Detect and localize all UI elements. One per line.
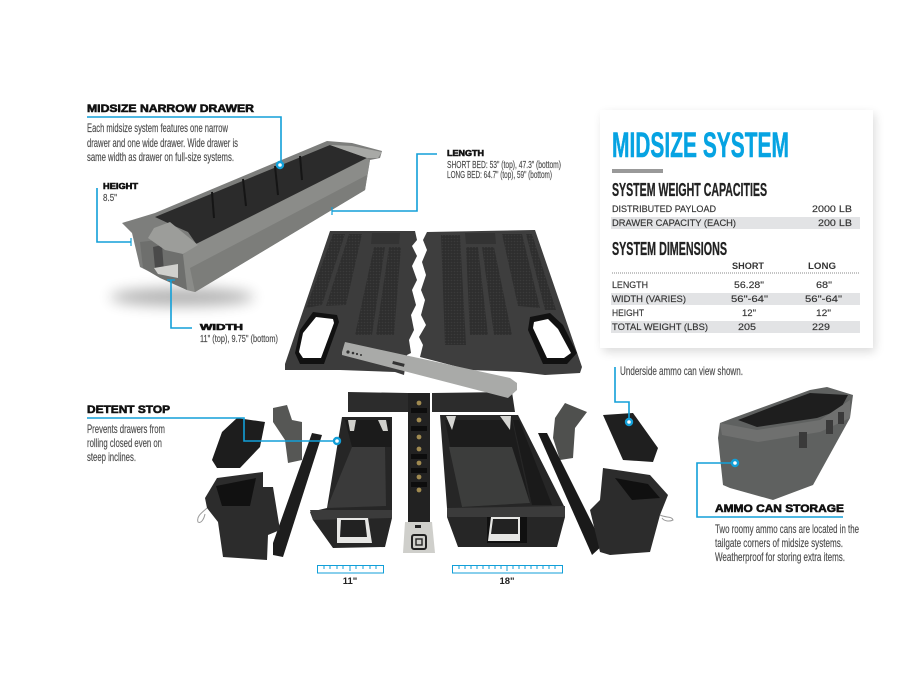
callout: length	[332, 148, 561, 215]
table: weight capacities: 200 LB	[818, 218, 852, 228]
table: system dimensions: 12"	[816, 308, 831, 318]
callout: length: LONG BED: 64.7" (top), 59" (bottom)	[447, 170, 552, 181]
callout: length: SHORT BED: 53" (top), 47.3" (bottom)	[447, 160, 561, 171]
callout: ammo can storage	[697, 460, 859, 564]
table: system dimensions: 12"	[742, 308, 756, 318]
photo: right bracket	[553, 403, 587, 460]
callout: height: 8.5"	[103, 193, 117, 204]
callout: ammo can storage: AMMO CAN STORAGE	[715, 503, 844, 515]
title: midsize system: MIDSIZE SYSTEM	[612, 126, 789, 165]
callout: underside ammo can view	[615, 364, 743, 425]
table: weight capacities	[611, 204, 860, 229]
table: system dimensions: SHORT	[732, 261, 765, 271]
callout: height	[97, 181, 139, 246]
photo: large ammo can	[718, 387, 853, 500]
callout: detent stop: DETENT STOP	[87, 404, 170, 416]
photo: narrow drawer bottom	[310, 417, 392, 548]
ruler: 11 inch	[318, 566, 384, 587]
ruler: 18 inch	[452, 566, 562, 587]
ruler: 11 inch: 11"	[343, 576, 357, 587]
callout: width	[167, 280, 278, 345]
table: weight capacities: DISTRIBUTED PAYLOAD	[612, 204, 716, 214]
callout: width: 11" (top), 9.75" (bottom)	[200, 334, 278, 345]
text: drawer description: same width as drawer on full-size systems.	[87, 150, 234, 164]
photo: left drawer rail	[273, 433, 322, 557]
photo: right drawer rail	[538, 433, 603, 555]
callout: detent stop	[87, 404, 340, 464]
callout: underside ammo can view: Underside ammo can view shown.	[620, 364, 743, 378]
text: drawer description: Each midsize system features one narrow	[87, 121, 228, 135]
table: system dimensions: 68"	[816, 280, 832, 290]
panel: midsize system specifications	[600, 110, 875, 352]
photo: right ammo can	[590, 468, 673, 555]
photo: midsize narrow drawer	[110, 141, 382, 306]
callout: width: WIDTH	[200, 322, 243, 332]
callout: detent stop: steep inclines.	[87, 450, 136, 464]
table: system dimensions: 205	[738, 322, 756, 332]
table: system dimensions: LENGTH	[612, 280, 648, 290]
callout: ammo can storage: Weatherproof for storing extra items.	[715, 550, 845, 564]
table: system dimensions: LONG	[808, 261, 836, 271]
callout: ammo can storage: tailgate corners of midsize systems.	[715, 536, 843, 550]
heading: system dimensions: SYSTEM DIMENSIONS	[612, 239, 727, 259]
heading: midsize narrow drawer: MIDSIZE NARROW DRAWER	[87, 103, 254, 115]
ruler: 18 inch: 18"	[499, 576, 515, 587]
photo: bed deck right panel	[419, 230, 582, 375]
table: system dimensions: TOTAL WEIGHT (LBS)	[612, 322, 708, 332]
photo: bed deck left panel	[285, 231, 417, 375]
photo: center rail	[403, 393, 435, 553]
table: system dimensions: HEIGHT	[612, 308, 644, 318]
photo: left ammo can	[198, 472, 280, 560]
table: system dimensions: 56.28"	[734, 280, 764, 290]
photo: metal slide bar	[342, 342, 517, 398]
photo: right ammo can lid underside	[603, 413, 658, 462]
photo: left bracket	[273, 405, 302, 463]
text: drawer description: drawer and one wide drawer. Wide drawer is	[87, 136, 238, 150]
callout: length: LENGTH	[447, 148, 484, 158]
table: system dimensions: WIDTH (VARIES)	[612, 294, 686, 304]
callout: height: HEIGHT	[103, 181, 139, 191]
table: weight capacities: DRAWER CAPACITY (EACH)	[612, 218, 736, 228]
text: drawer description	[87, 121, 238, 164]
table: weight capacities: 2000 LB	[812, 204, 852, 214]
photo: tailgate back plate	[348, 392, 515, 412]
photo: wide drawer bottom	[440, 415, 565, 547]
table: system dimensions: 229	[812, 322, 830, 332]
heading: system weight capacities: SYSTEM WEIGHT CAPACITIES	[612, 180, 767, 200]
callout: detent stop: Prevents drawers from	[87, 422, 165, 436]
callout: midsize narrow drawer	[87, 103, 283, 168]
table: system dimensions: 56"-64"	[805, 294, 842, 304]
table: system dimensions: 56"-64"	[731, 294, 768, 304]
callout: detent stop: rolling closed even on	[87, 436, 162, 450]
table: system dimensions	[611, 261, 860, 333]
photo: left ammo can lid underside	[212, 418, 265, 468]
